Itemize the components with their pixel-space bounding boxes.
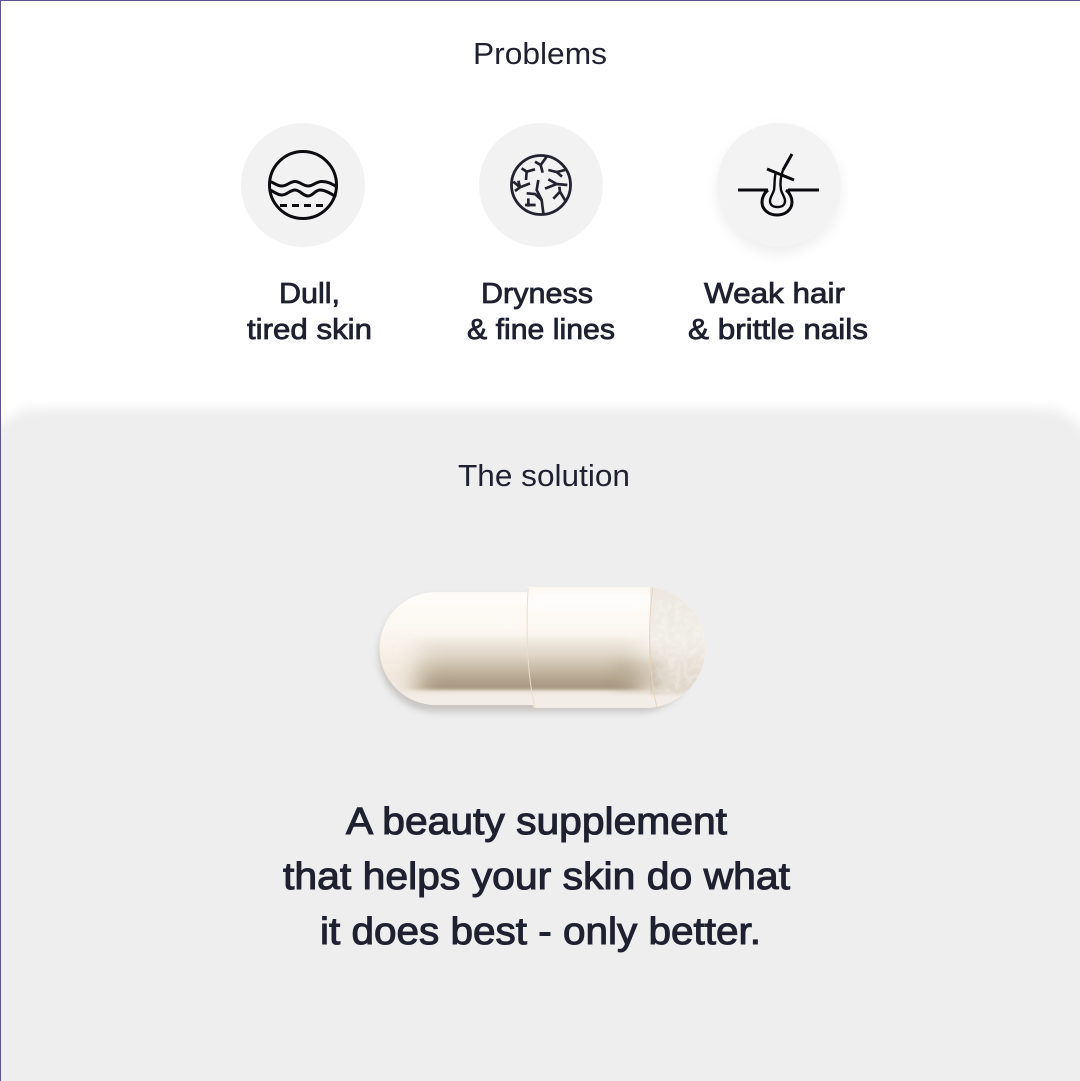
heading: the solution: The solution bbox=[458, 458, 630, 493]
label: dryness and fine lines: Dryness bbox=[481, 278, 593, 310]
icon: cracked skin bbox=[479, 123, 603, 247]
headline bbox=[283, 801, 790, 953]
label: dull, tired skin: Dull, bbox=[279, 278, 340, 310]
label: dull, tired skin: tired skin bbox=[247, 314, 372, 346]
headline: that helps your skin do what bbox=[283, 856, 790, 898]
label: dull, tired skin bbox=[247, 278, 372, 346]
heading: problems: Problems bbox=[473, 36, 607, 71]
label: dryness and fine lines bbox=[467, 278, 615, 346]
headline: it does best - only better. bbox=[320, 911, 761, 953]
icon: hair follicle bbox=[717, 123, 841, 251]
problem: dryness and fine lines bbox=[467, 123, 615, 346]
icon: skin layers bbox=[241, 123, 365, 247]
label: dryness and fine lines: & fine lines bbox=[467, 314, 615, 346]
problem: weak hair and brittle nails bbox=[688, 123, 868, 346]
headline: A beauty supplement bbox=[346, 801, 727, 843]
label: weak hair and brittle nails: Weak hair bbox=[704, 278, 845, 310]
problem: dull, tired skin bbox=[241, 123, 372, 346]
panel: the solution bbox=[0, 408, 1080, 1081]
label: weak hair and brittle nails bbox=[688, 278, 868, 346]
capsule bbox=[370, 580, 710, 715]
label: weak hair and brittle nails: & brittle nails bbox=[688, 314, 868, 346]
